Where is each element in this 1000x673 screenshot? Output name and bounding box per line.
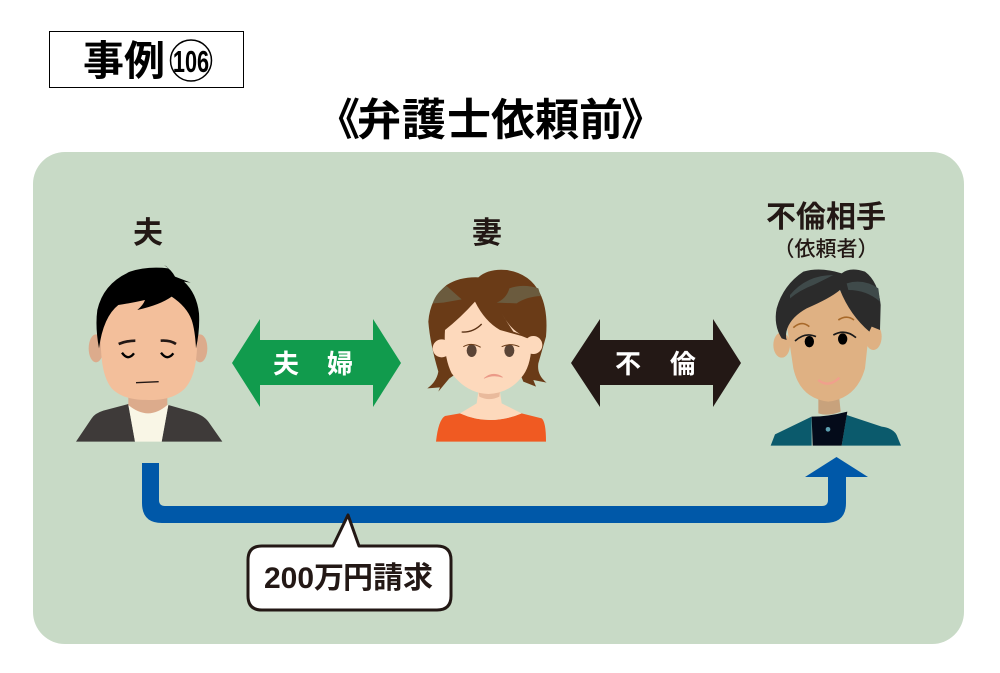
case label box: 106 (173, 44, 209, 79)
label: affair partner: 不倫相手 (766, 201, 886, 234)
title: 《弁護士依頼前》 (316, 96, 665, 145)
case label box (50, 32, 244, 88)
callout: claim amount: 200 (264, 562, 314, 595)
arrow: married couple: 夫 (273, 349, 299, 379)
arrow: married couple: 婦 (327, 349, 353, 379)
label: affair partner: （依頼者） (774, 238, 878, 261)
icon: wife (427, 270, 547, 442)
icon: affair partner (771, 270, 901, 446)
arrow: affair: 不 (615, 349, 641, 379)
label: wife: 妻 (472, 217, 502, 250)
arrow: affair: 倫 (670, 349, 696, 379)
arrow: claim from husband to partner (142, 457, 868, 523)
arrow: affair (571, 319, 741, 407)
panel: background (33, 152, 964, 644)
label: affair partner (766, 201, 886, 261)
label: husband: 夫 (133, 217, 163, 250)
icon: husband (76, 265, 222, 442)
callout: claim amount: 万円請求 (314, 562, 433, 595)
case label box: 事例 (83, 38, 165, 84)
callout: claim amount (248, 515, 451, 610)
arrow: married couple (232, 319, 401, 407)
